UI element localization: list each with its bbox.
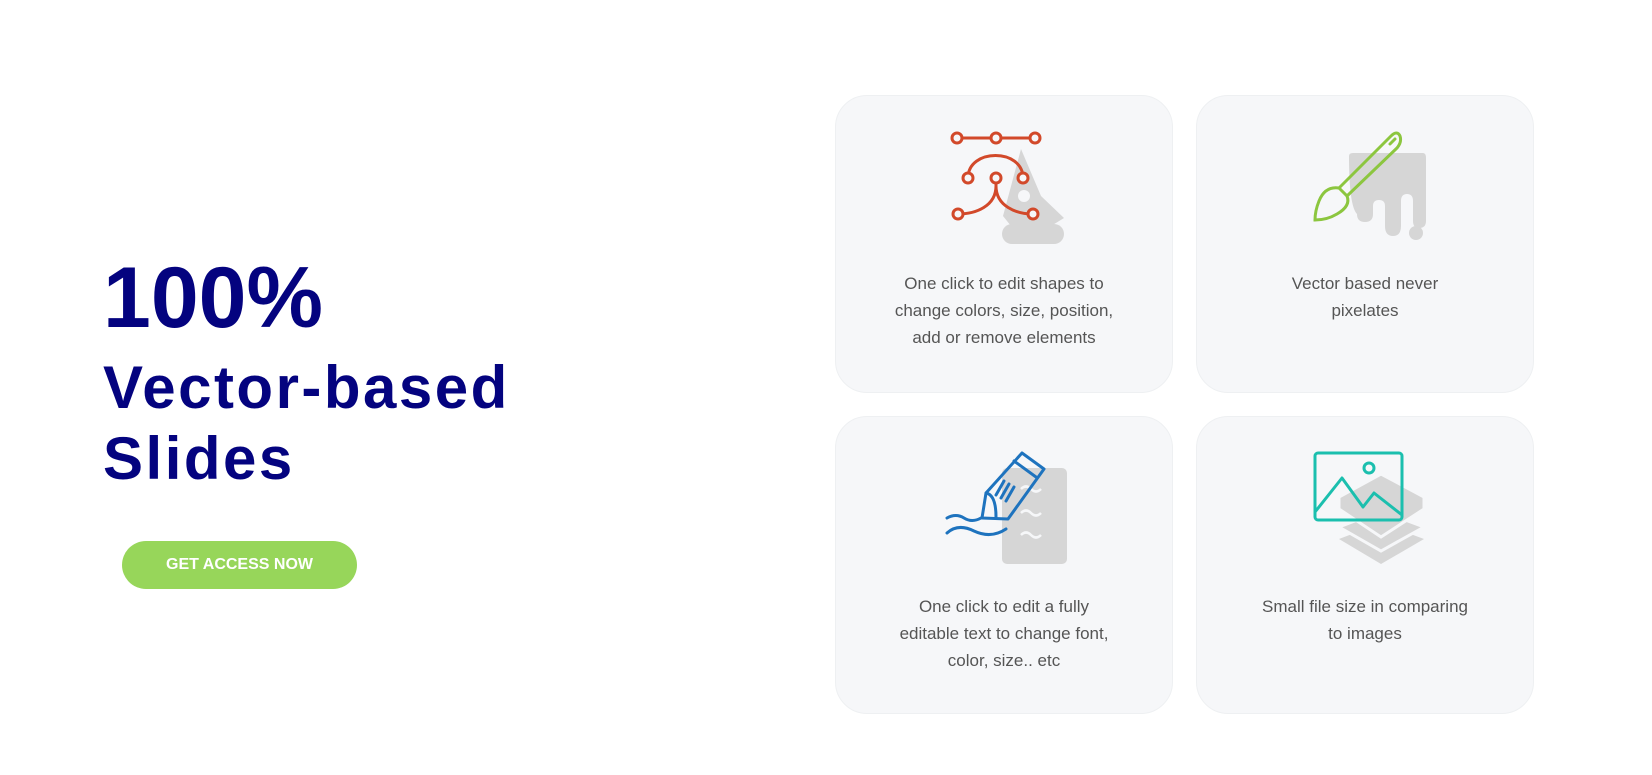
icon: pen tool with nodes	[950, 132, 1064, 244]
text: editable text caption: One click to edit a fully	[919, 597, 1089, 616]
text: file size caption	[1262, 597, 1468, 643]
subtitle: Vector-based Slides	[103, 354, 510, 492]
text: pixelates caption: Vector based never	[1292, 274, 1438, 293]
icon: paint brush	[1314, 132, 1426, 240]
panel: edit shapes	[835, 95, 1173, 393]
text: file size caption: Small file size in comparing	[1262, 597, 1468, 616]
text: editable text caption: color, size.. etc	[948, 651, 1060, 670]
text: editable text caption	[900, 597, 1108, 670]
text: pixelates caption	[1292, 274, 1438, 320]
text: edit shapes caption: change colors, size, position,	[895, 301, 1113, 320]
icon: pencil on document	[945, 451, 1067, 564]
icon: image over layers	[1314, 452, 1424, 564]
text: edit shapes caption: One click to edit shapes to	[904, 274, 1104, 293]
title: 100%: 100%	[103, 250, 323, 346]
text: edit shapes caption	[895, 274, 1113, 347]
text: file size caption: to images	[1328, 624, 1402, 643]
panel: vector never pixelates	[1196, 95, 1534, 393]
panel: small file size	[1196, 416, 1534, 714]
text: editable text caption: editable text to change font,	[900, 624, 1108, 643]
button: get access now: GET ACCESS NOW	[166, 556, 313, 573]
text: pixelates caption: pixelates	[1331, 301, 1399, 320]
subtitle: Vector-based Slides: Slides	[103, 425, 295, 492]
button: get access now	[122, 541, 357, 589]
panel: editable text	[835, 416, 1173, 714]
subtitle: Vector-based Slides: Vector-based	[103, 354, 510, 421]
text: edit shapes caption: add or remove elements	[912, 328, 1096, 347]
